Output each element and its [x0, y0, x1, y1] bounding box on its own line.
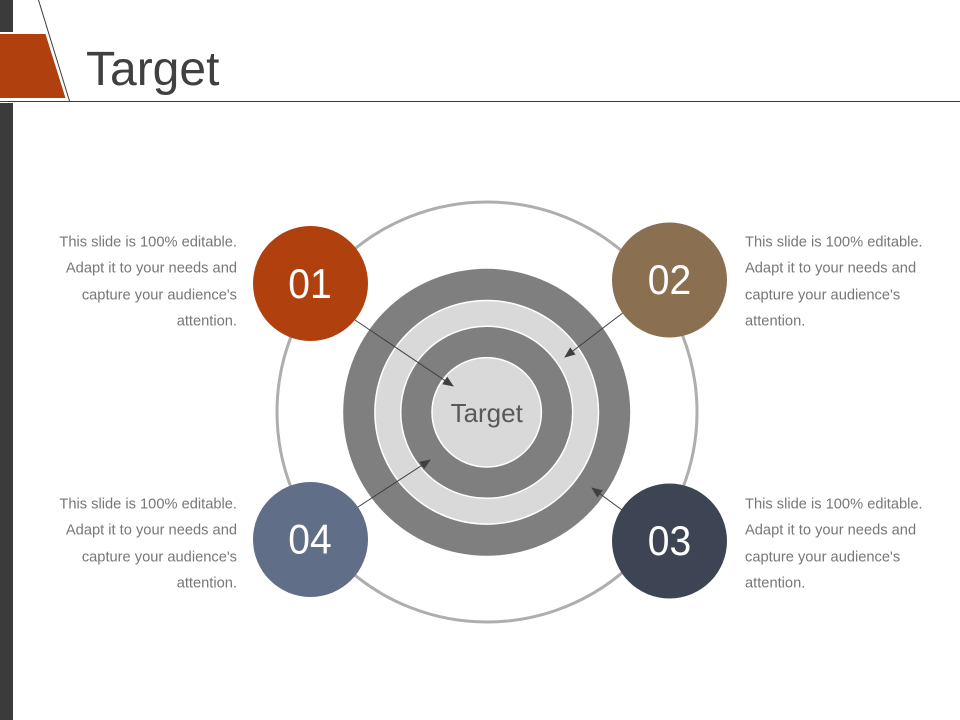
- arrow 03 to target: [592, 488, 622, 510]
- badge 02: 02: [648, 256, 691, 303]
- text block 03: Adapt it to your needs and: [745, 522, 916, 538]
- text block 03: capture your audience's: [745, 550, 900, 566]
- text block 02: This slide is 100% editable.: [745, 234, 923, 250]
- text block 01: attention.: [177, 314, 237, 330]
- header rule: [0, 100, 960, 102]
- text block 01: capture your audience's: [82, 288, 237, 304]
- text block 01: Adapt it to your needs and: [66, 260, 237, 276]
- text block 04: Adapt it to your needs and: [66, 522, 237, 538]
- text block 04: [59, 496, 237, 592]
- arrow 04 to target: [358, 460, 430, 507]
- text block 03: [745, 496, 923, 592]
- arrow 01 to target: [355, 320, 453, 386]
- text block 04: attention.: [177, 576, 237, 592]
- left sidebar strip: [0, 0, 13, 720]
- badge 03: [612, 484, 727, 598]
- text block 03: attention.: [745, 576, 805, 592]
- outer ring: [277, 202, 697, 622]
- text block 01: This slide is 100% editable.: [59, 234, 237, 250]
- arrow 02 to target: [565, 312, 624, 357]
- badge 01: 01: [288, 260, 332, 307]
- center label: Target: [451, 398, 524, 428]
- badge 01: [253, 226, 368, 341]
- text block 04: capture your audience's: [82, 550, 237, 566]
- text block 04: This slide is 100% editable.: [59, 496, 237, 512]
- badge 02: [612, 222, 727, 338]
- badge 04: 04: [288, 515, 332, 563]
- target chart: [343, 269, 630, 556]
- text block 01: [59, 234, 237, 330]
- text block 02: attention.: [745, 314, 805, 330]
- badge 04: [253, 482, 368, 597]
- badge 03: 03: [648, 517, 691, 564]
- text block 02: capture your audience's: [745, 288, 900, 304]
- title: Target: [86, 43, 219, 96]
- text block 03: This slide is 100% editable.: [745, 496, 923, 512]
- text block 02: [745, 234, 923, 330]
- text block 02: Adapt it to your needs and: [745, 260, 916, 276]
- header accent trapezoid: [0, 34, 66, 98]
- header slanted line: [38, 0, 70, 101]
